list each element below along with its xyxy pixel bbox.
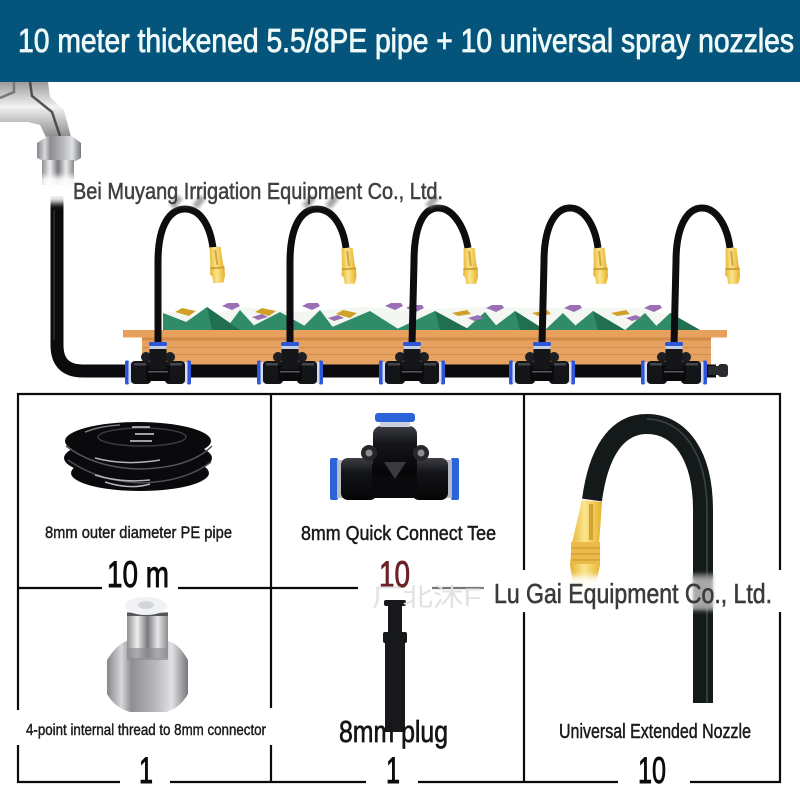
product grid table [18, 394, 780, 782]
flowers [222, 303, 662, 321]
label: nozzle name: Universal Extended Nozzle [559, 721, 751, 743]
nozzle riser 3 [412, 208, 478, 345]
tee connector 2 [257, 342, 323, 384]
tee connector 4 [509, 342, 575, 384]
faucet [0, 82, 81, 185]
label: pipe name: 8mm outer diameter PE pipe [45, 523, 232, 542]
panel: PE pipe [45, 422, 232, 595]
quantity: 10 m: 10 m [107, 554, 169, 595]
label: connector name: 4-point internal thread to 8mm connector [26, 722, 267, 739]
header banner [0, 0, 800, 82]
planter body [142, 337, 711, 366]
watermark 1 [40, 176, 445, 207]
icon: large nozzle [570, 419, 707, 703]
faucet adapter [37, 136, 81, 163]
icon: pipe coil [64, 422, 212, 491]
tee connector 3 [379, 342, 445, 384]
irrigation system diagram [0, 82, 740, 384]
plants [163, 307, 700, 330]
quantity: 1 connector: 1 [139, 750, 153, 791]
watermark 2: 厂北沐F [372, 584, 482, 612]
quantity: 1 plug: 1 [386, 750, 400, 791]
tee connector 5 [641, 342, 707, 384]
icon: large tee connector [330, 413, 459, 500]
panel: quick connect tee [301, 413, 496, 595]
panel: plug [339, 600, 448, 791]
icon: threaded connector [107, 597, 188, 712]
quantity: 10 nozzles: 10 [638, 750, 666, 791]
end plug [708, 364, 728, 377]
planter box with plants [123, 303, 727, 366]
nozzle riser 1 [158, 209, 225, 345]
label: plug name: 8mm plug [339, 714, 448, 749]
watermark 2 [372, 574, 778, 612]
tee connector 1 [125, 342, 191, 384]
watermark 1: Bei Muyang Irrigation Equipment Co., Ltd. [73, 178, 443, 204]
nozzle riser 2 [290, 209, 357, 345]
main supply pipe [57, 196, 716, 371]
quantity: 10 tees: 10 [379, 554, 410, 595]
icon: plug [383, 600, 407, 732]
nozzle riser 4 [542, 208, 608, 345]
panel: threaded connector [26, 597, 267, 791]
label: tee name: 8mm Quick Connect Tee [301, 523, 496, 545]
nozzle riser 5 [674, 208, 740, 345]
panel: universal nozzle [559, 419, 751, 791]
planter lip [123, 330, 727, 338]
